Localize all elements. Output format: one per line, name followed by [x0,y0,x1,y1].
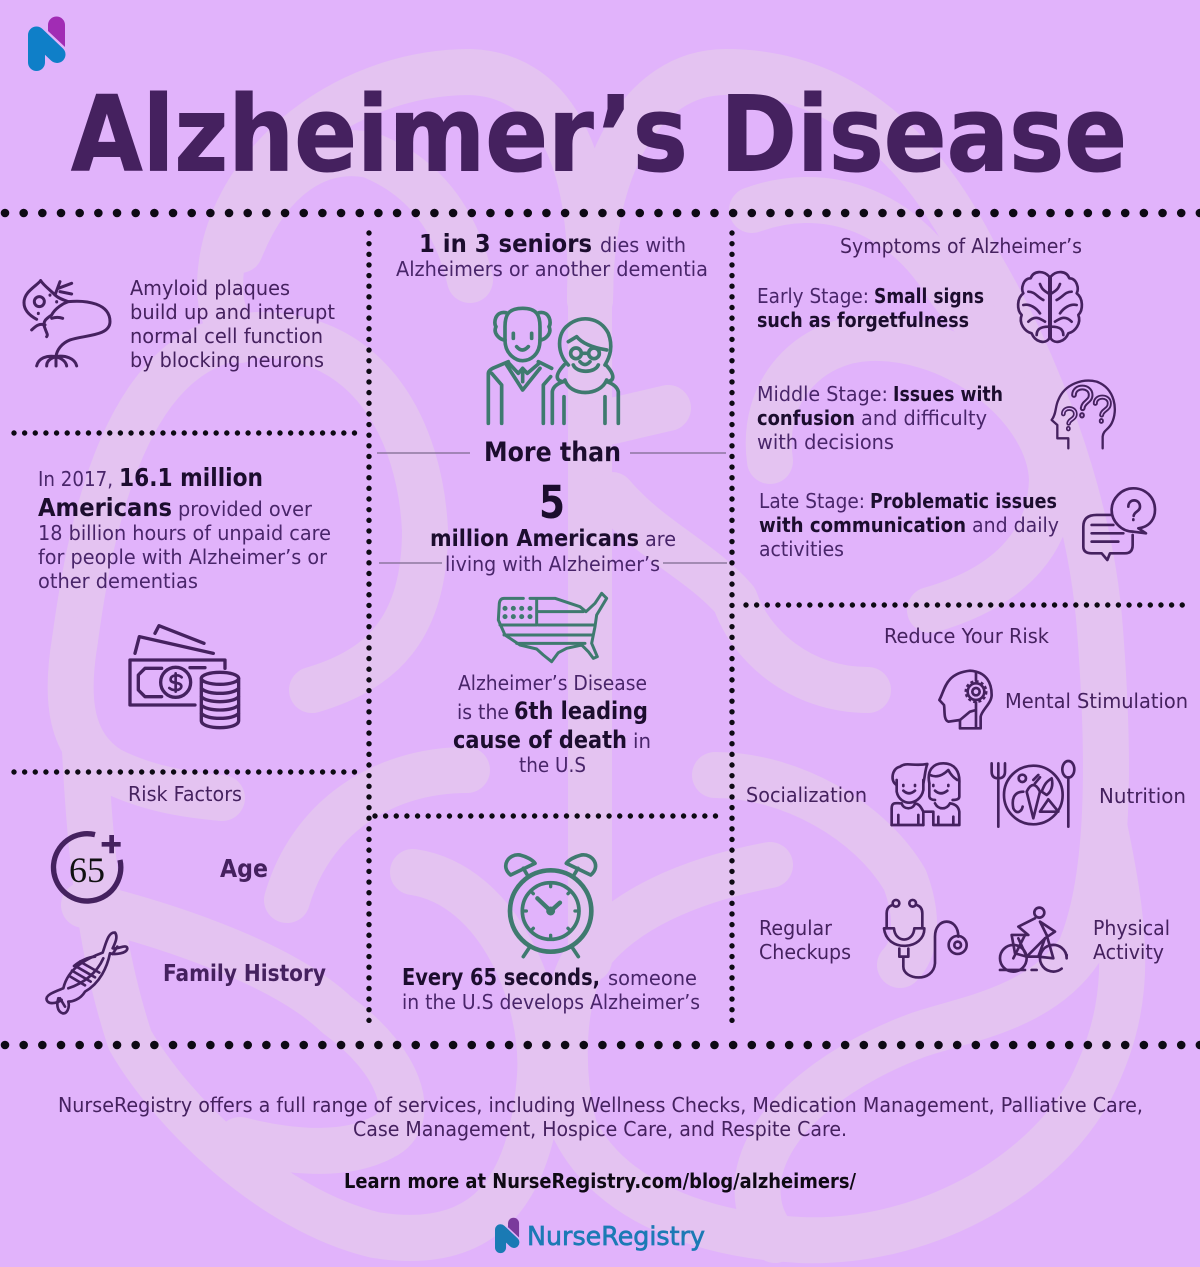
text: late stage: with communication [759,513,966,537]
text: 1 in 3 seniors: Alzheimers or another dementia [396,257,708,281]
text: 6th leading cause: cause of death [453,726,627,754]
text: more than 5 million: 5 [539,476,565,529]
text: unpaid care statistic: In 2017, [38,467,113,491]
panel: center statistics [377,229,727,1014]
text: every 65 seconds: in the U.S develops Alzheimer’s [402,990,700,1014]
text: 6th leading cause: in [633,729,651,753]
heading: reduce your risk: Reduce Your Risk [884,624,1049,648]
text: 6th leading cause: Alzheimer’s Disease [458,671,647,695]
label: socialization: Socialization [746,783,867,807]
label: age: Age [220,854,268,883]
text: unpaid care statistic: Americans [38,493,172,522]
text: unpaid care statistic [38,463,331,593]
text: middle stage [757,382,1003,454]
icon: stethoscope [884,900,967,977]
panel: symptoms [757,234,1155,561]
icon: two friends [892,763,959,825]
text: late stage [759,489,1059,561]
text: 6th leading cause: 6th leading [514,697,648,725]
label: physical activity: Activity [1093,940,1164,964]
label: nutrition: Nutrition [1099,784,1186,808]
text: early stage: such as forgetfulness [757,308,969,332]
text: late stage: activities [759,537,844,561]
text: late stage: Problematic issues [870,489,1057,513]
text: amyloid plaques: build up and interupt [130,300,335,324]
icon: mental stimulation head [939,671,992,728]
icon: age 65 plus: 65 [69,850,105,890]
text: unpaid care statistic: provided over [178,497,313,521]
icon: brain [1018,272,1082,342]
text: more than 5 million: million Americans [430,526,639,552]
label: physical activity: Physical [1093,916,1170,940]
text: late stage: Late Stage: [759,489,865,513]
icon: US map flag [498,593,607,662]
heading: symptoms: Symptoms of Alzheimer’s [840,234,1082,258]
text: every 65 seconds [402,965,700,1014]
footer text: NurseRegistry offers a full range of services, including Wellness Checks, Medication Management, Palliative Care, [58,1093,1143,1117]
icon: speech bubbles [1083,488,1155,560]
icon: cyclist [1000,908,1067,972]
footer text: Learn more at NurseRegistry.com/blog/alzheimers/ [344,1169,857,1193]
icon: neuron cell [24,281,110,366]
label: family history: Family History [163,961,326,987]
text: early stage: Small signs [874,284,984,308]
text: 1 in 3 seniors: dies with [600,233,686,257]
text: more than 5 million: More than [484,437,621,468]
label: regular checkups: Checkups [759,940,851,964]
text: 6th leading cause [453,671,651,777]
text: amyloid plaques: Amyloid plaques [130,276,290,300]
text: middle stage: confusion [757,406,855,430]
panel: risk factors [46,782,326,1013]
text: early stage: Early Stage: [757,284,869,308]
text: middle stage: with decisions [757,430,894,454]
label: physical activity [1093,916,1170,964]
text: early stage [757,284,984,332]
text: 1 in 3 seniors [396,229,708,281]
panel: amyloid plaques [24,276,335,372]
logo: NurseRegistry mark [36,16,65,62]
text: every 65 seconds: someone [608,966,697,990]
text: every 65 seconds: Every 65 seconds, [402,965,600,991]
icon: alarm clock [506,855,596,957]
panel: reduce your risk [746,624,1188,977]
text: amyloid plaques: normal cell function [130,324,323,348]
text: unpaid care statistic: for people with Alzheimer’s or [38,545,328,569]
text: late stage: and daily [972,513,1059,537]
text: 6th leading cause: the U.S [519,753,586,777]
text: more than 5 million: are [645,527,676,551]
text: unpaid care statistic: other dementias [38,569,198,593]
footer text: Case Management, Hospice Care, and Respite Care. [353,1117,847,1141]
icon: DNA helix [46,933,127,1013]
text: unpaid care statistic: 18 billion hours of unpaid care [38,521,331,545]
text: amyloid plaques: by blocking neurons [130,348,324,372]
icon: nutrition plate [992,761,1074,827]
text: more than 5 million [377,437,727,576]
text: unpaid care statistic: 16.1 million [119,463,263,492]
icon: head with question marks [1052,381,1115,448]
text: middle stage: Middle Stage: [757,382,888,406]
footer text [58,1093,1143,1193]
footer logo: NurseRegistry: NurseRegistry [527,1222,705,1252]
label: mental stimulation: Mental Stimulation [1005,689,1188,713]
label: regular checkups [759,916,851,964]
icon: elderly couple [488,308,618,423]
text: middle stage: and difficulty [861,406,987,430]
panel: unpaid care [38,463,331,728]
text: 6th leading cause: is the [457,700,509,724]
text: amyloid plaques [130,276,335,372]
label: regular checkups: Regular [759,916,833,940]
heading: risk factors: Risk Factors [128,782,242,806]
text: middle stage: Issues with [893,382,1003,406]
text: 1 in 3 seniors: 1 in 3 seniors [419,229,592,258]
icon: money and coins [130,626,239,728]
icon: age 65 plus [53,834,121,901]
text: more than 5 million: living with Alzheimer’s [445,552,660,576]
